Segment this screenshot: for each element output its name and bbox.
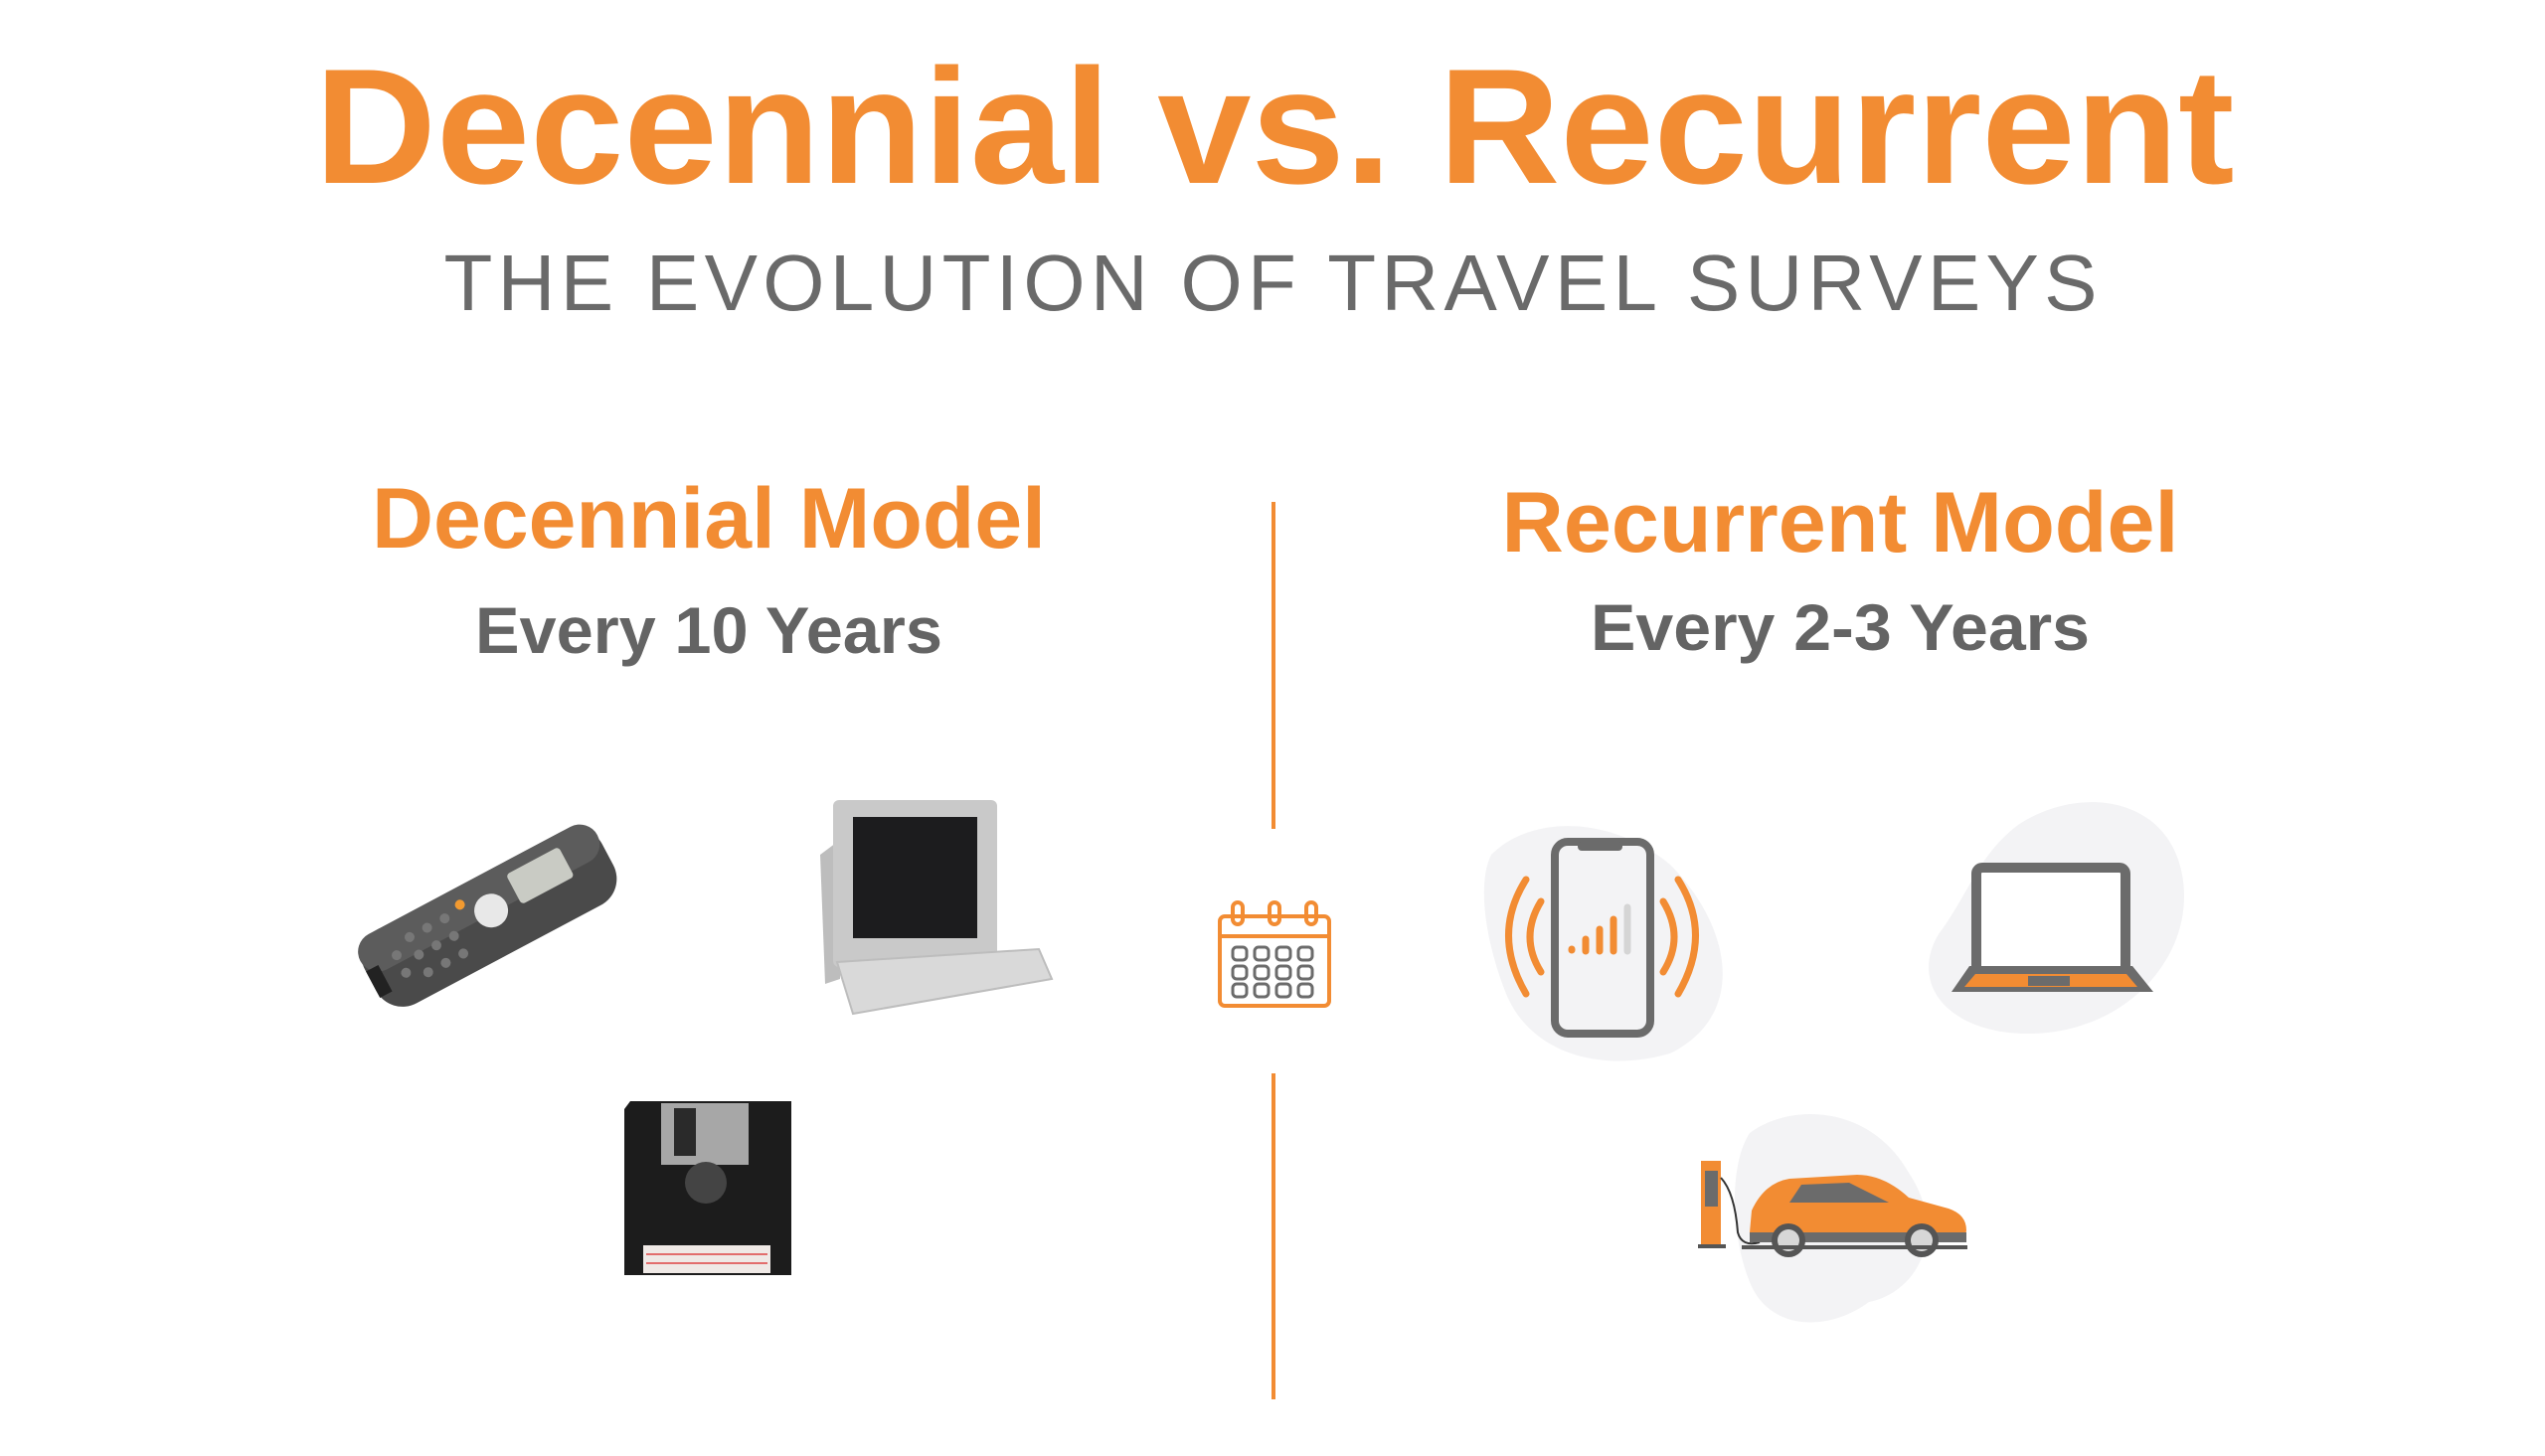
icon: laptop: [1929, 802, 2184, 1034]
heading: recurrent model: Every 2-3 Years: [1591, 590, 2090, 664]
icon: cordless phone: [351, 818, 627, 1017]
icon: floppy disk: [624, 1101, 791, 1275]
heading: recurrent model: Recurrent Model: [1501, 475, 2179, 570]
icon: crt computer: [820, 800, 1052, 1014]
icon: electric car charging: [1698, 1114, 1967, 1322]
divider line top: [1272, 502, 1275, 829]
heading: decennial model: Decennial Model: [372, 471, 1046, 566]
heading: decennial model: [372, 471, 1046, 667]
heading: recurrent model: [1501, 475, 2179, 664]
heading: decennial model: Every 10 Years: [475, 593, 942, 667]
icon: calendar: [1220, 902, 1329, 1006]
subtitle: THE EVOLUTION OF TRAVEL SURVEYS: [443, 239, 2098, 327]
title: Decennial vs. Recurrent: [314, 35, 2235, 218]
icon: smartphone with signal: [1484, 826, 1723, 1061]
divider line bottom: [1272, 1073, 1275, 1399]
